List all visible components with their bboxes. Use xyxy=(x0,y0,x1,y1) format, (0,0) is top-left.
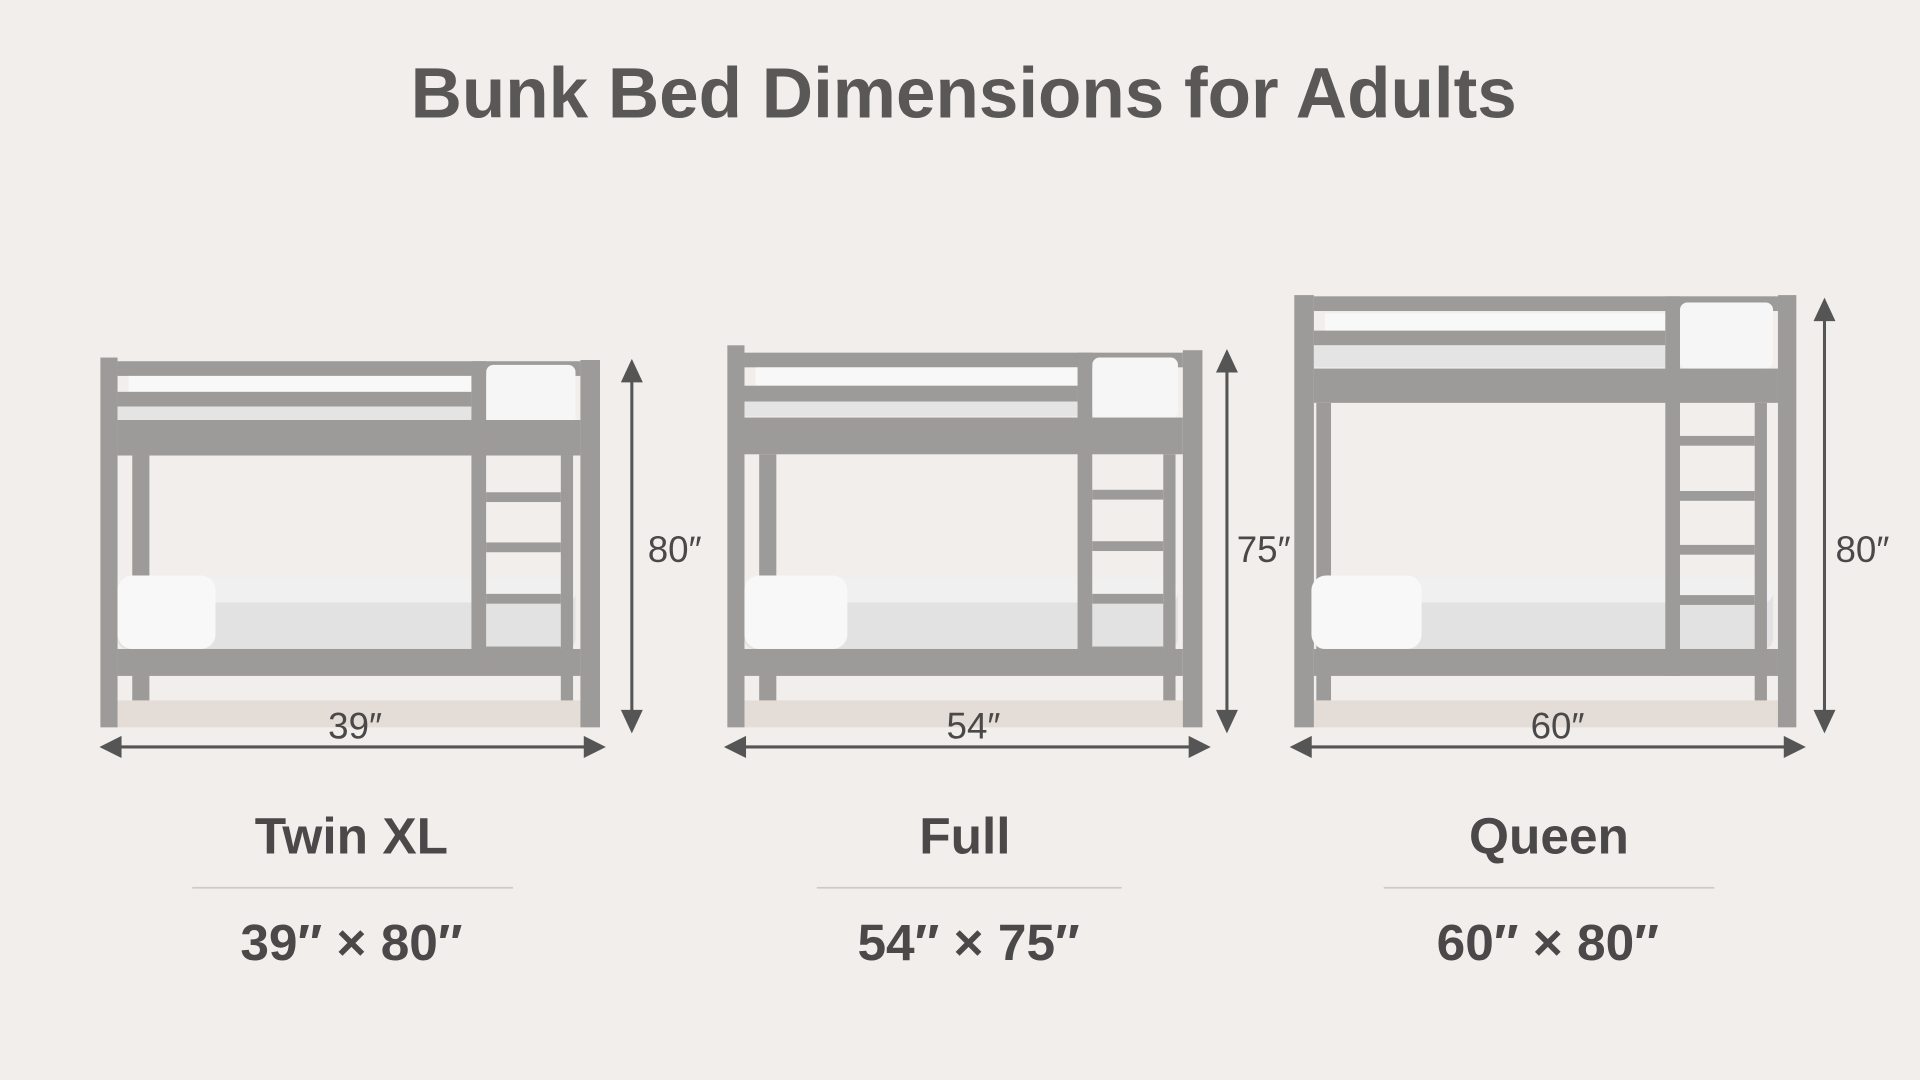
height arrow: 80 xyxy=(1816,301,1833,730)
height label: 80: 80″ xyxy=(648,529,702,570)
label: full: Full xyxy=(919,806,1011,864)
label: full xyxy=(817,806,1122,971)
bed: twin xl xyxy=(100,358,600,727)
label: twin xl: 39″ × 80″ xyxy=(240,913,463,971)
label: queen xyxy=(1384,806,1714,971)
label: full: 54″ × 75″ xyxy=(857,913,1080,971)
height arrow: 80 xyxy=(623,362,640,730)
height label: 80: 80″ xyxy=(1836,529,1889,570)
label: twin xl: Twin XL xyxy=(255,806,448,864)
width arrow: 54 xyxy=(727,738,1207,756)
height arrow: 75 xyxy=(1218,353,1236,730)
label: queen: 60″ × 80″ xyxy=(1437,913,1659,971)
height label: 75: 75″ xyxy=(1237,529,1291,570)
width arrow: 60 xyxy=(1293,738,1802,756)
label: twin xl xyxy=(192,806,513,971)
bed: queen xyxy=(1294,295,1796,727)
width label: 60: 60″ xyxy=(1531,705,1584,746)
width label: 39: 39″ xyxy=(328,705,382,746)
title: Bunk Bed Dimensions for Adults xyxy=(411,55,1517,134)
label: queen: Queen xyxy=(1469,806,1629,864)
bed: full xyxy=(727,345,1202,727)
width arrow: 39 xyxy=(103,738,602,756)
width label: 54: 54″ xyxy=(947,705,1000,746)
